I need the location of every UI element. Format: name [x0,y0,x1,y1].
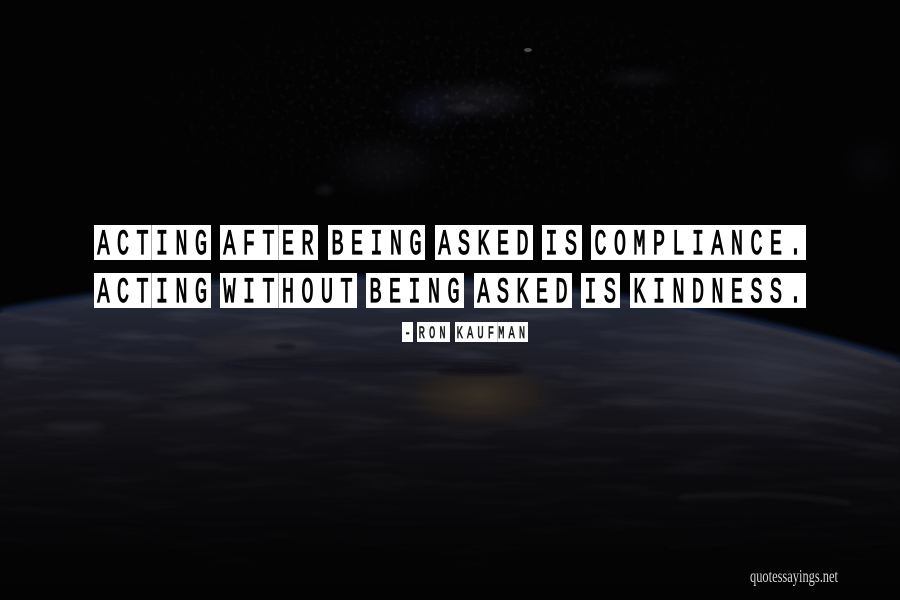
word: ASKED: ASKED [438,225,536,265]
word: IS: IS [545,225,584,265]
word: WITHOUT: WITHOUT [223,273,360,313]
word: KINDNESS.: KINDNESS. [633,273,809,313]
background: night sky [310,48,667,195]
word: BEING: BEING [369,273,467,313]
background: earth with clouds and horizon [0,273,900,516]
word: ACTING: ACTING [97,225,214,265]
word: ACTING: ACTING [97,273,214,313]
watermark: quotessayings.net [750,566,838,586]
author attribution [402,322,529,344]
quote line 2 [94,273,809,313]
author: KAUFMAN: KAUFMAN [457,325,529,344]
author: RON: RON [419,325,450,344]
cloud streaks on the right [682,318,895,503]
author dash: - [404,325,415,344]
word: COMPLIANCE.: COMPLIANCE. [594,225,809,265]
quote line 1 [94,225,809,265]
word: AFTER: AFTER [223,225,321,265]
word: IS: IS [584,273,623,313]
word: ASKED: ASKED [477,273,575,313]
word: BEING: BEING [331,225,429,265]
